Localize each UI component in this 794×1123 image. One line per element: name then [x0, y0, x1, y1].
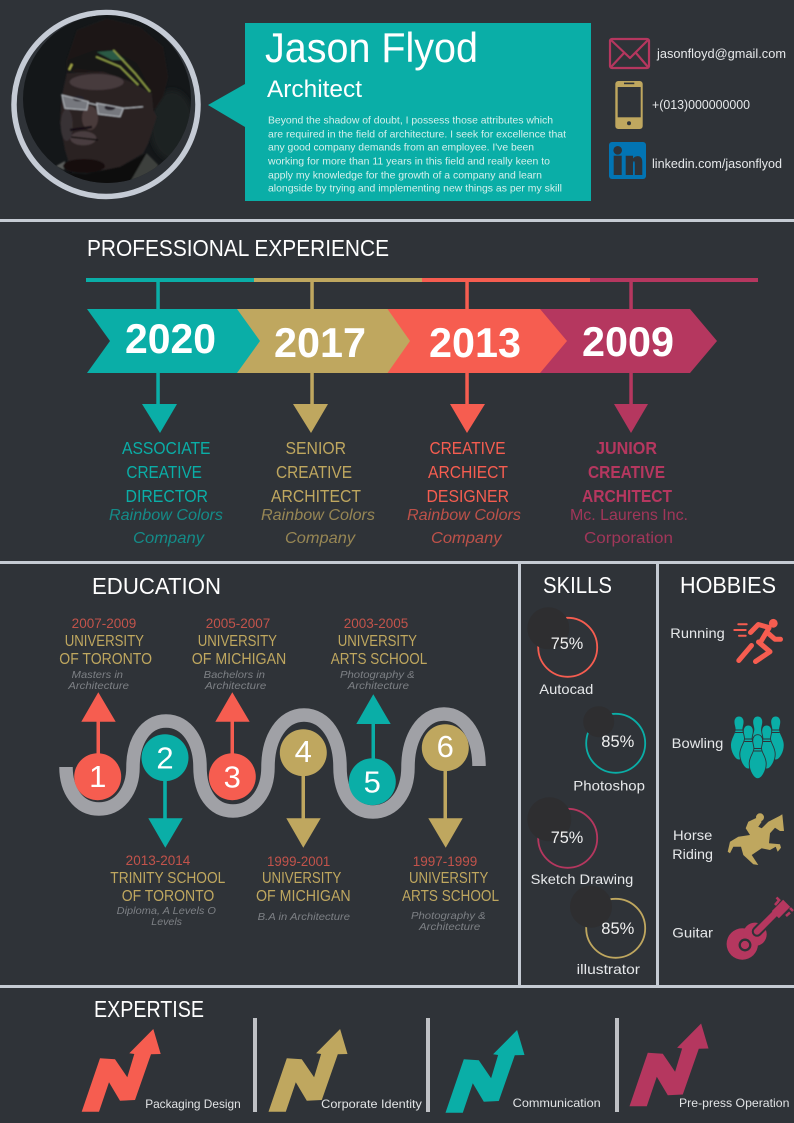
milestone 5: 5 [364, 764, 381, 800]
profile paragraph: are required in the field of architecture. I seek for excellence that [268, 130, 566, 140]
education: 2003-2005: ARTS SCHOOL [331, 651, 428, 668]
milestone 2 [142, 734, 188, 848]
icon: runner [734, 619, 780, 662]
job: senior creative architect: Rainbow Colors [261, 507, 375, 524]
education: 2013-2014: 2013-2014 [126, 853, 191, 868]
milestone 1: 1 [89, 759, 106, 794]
job: senior creative architect: ARCHITECT [271, 486, 361, 506]
education: 2005-2007: OF MICHIGAN [192, 651, 286, 668]
education: 2013-2014: Levels [151, 916, 183, 928]
arrow: 2017 down [293, 373, 328, 433]
education: 1997-1999: 1997-1999 [413, 854, 477, 869]
icon: bowling pins [730, 716, 784, 779]
education: 2003-2005: UNIVERSITY [338, 633, 417, 650]
icon: rising arrow pink [630, 1024, 708, 1106]
skill: sketch drawing [527, 797, 633, 887]
skill: photoshop: Photoshop [573, 778, 645, 794]
job: creative archiect designer: Rainbow Colors [407, 507, 521, 524]
profile paragraph: apply my knowledge for the growth of a company and learn [268, 170, 542, 182]
profile paragraph: working for more than 11 years in this field and really keen to [267, 156, 550, 168]
education: 2005-2007 [192, 616, 286, 692]
job: creative archiect designer: CREATIVE [430, 438, 506, 458]
skill: autocad: Autocad [539, 681, 593, 697]
job: senior creative architect: CREATIVE [276, 462, 352, 482]
profile paragraph [267, 116, 566, 194]
expertise: packaging design [82, 1029, 241, 1112]
education: 2007-2009: OF TORONTO [59, 651, 152, 668]
skill: photoshop: 85% [601, 733, 635, 751]
winding education road [66, 714, 479, 812]
education: 1999-2001 [256, 854, 351, 923]
profile paragraph: any good company demands from an employee. I've been [268, 142, 534, 154]
education: 2005-2007: Architecture [204, 680, 266, 692]
arrow: 2013 down [450, 373, 485, 433]
hobby: guitar [672, 898, 793, 960]
education: 2005-2007: Bachelors in [204, 669, 265, 681]
heading: skills: SKILLS [543, 572, 612, 598]
education: 1997-1999 [402, 854, 499, 933]
milestone 6 [422, 724, 469, 848]
skill: sketch drawing: 75% [551, 829, 584, 847]
job: associate creative director [109, 438, 223, 547]
experience timeline bar [86, 278, 758, 309]
expertise: pre-press operation: Pre-press Operation [679, 1096, 789, 1110]
expertise: corporate identity: Corporate Identity [321, 1097, 422, 1111]
chevron 2020: 2020 [125, 315, 216, 362]
heading: hobbies: HOBBIES [680, 572, 776, 598]
job: senior creative architect: SENIOR [286, 438, 346, 458]
contact: email: jasonfloyd@gmail.com [656, 47, 786, 61]
milestone 3 [209, 692, 256, 800]
job: associate creative director: ASSOCIATE [122, 438, 210, 458]
arrow: 2020 down [142, 373, 177, 433]
heading: expertise: EXPERTISE [94, 996, 204, 1022]
job: associate creative director: CREATIVE [126, 462, 202, 482]
contact: linkedin [609, 142, 782, 179]
job: junior creative architect: Mc. Laurens Inc. [570, 507, 688, 524]
education: 2007-2009: 2007-2009 [72, 616, 136, 631]
job: junior creative architect: Corporation [584, 530, 673, 547]
skill: autocad [527, 607, 597, 697]
heading: professional experience: PROFESSIONAL EXPERIENCE [87, 235, 389, 261]
hobby: horse riding [672, 813, 784, 865]
education: 1999-2001: UNIVERSITY [262, 870, 341, 887]
education: 2003-2005 [331, 616, 428, 692]
arrow: 2009 down [614, 373, 648, 433]
job: associate creative director: Company [133, 530, 205, 547]
education: 2007-2009: Masters in [72, 669, 123, 681]
chevron 2013 [380, 309, 567, 373]
job: creative archiect designer: DESIGNER [426, 486, 509, 506]
chevron 2017: 2017 [274, 319, 366, 366]
icon: phone [615, 81, 643, 129]
callout: name and profile [208, 23, 591, 201]
job: junior creative architect: CREATIVE [588, 462, 665, 482]
education: 2003-2005: Architecture [347, 680, 409, 692]
job: creative archiect designer: ARCHIECT [428, 462, 508, 482]
milestone 4 [280, 729, 327, 848]
expertise: pre-press operation [630, 1024, 789, 1110]
education: 2007-2009: UNIVERSITY [65, 633, 144, 650]
icon: envelope [610, 39, 649, 68]
skill: illustrator: 85% [601, 920, 635, 938]
hobby: bowling: Bowling [672, 735, 723, 751]
year chevrons [87, 309, 717, 373]
education: 2003-2005: 2003-2005 [344, 616, 408, 631]
milestone 4: 4 [295, 734, 312, 769]
education: 2007-2009 [59, 616, 152, 692]
icon: rising arrow coral [82, 1029, 161, 1112]
milestone 5 [349, 694, 396, 805]
chevron 2013: 2013 [429, 319, 521, 366]
job: junior creative architect [570, 438, 688, 547]
education: 2013-2014: TRINITY SCHOOL [110, 870, 226, 887]
hobby: running: Running [670, 625, 725, 641]
education: 1999-2001: 1999-2001 [267, 854, 330, 869]
hobby: running [670, 619, 780, 662]
icon: horse and rider [728, 813, 784, 865]
icon: rising arrow tan [268, 1029, 348, 1112]
hobby: guitar: Guitar [672, 925, 713, 941]
icon: guitar [727, 898, 793, 960]
chevron 2009 [530, 309, 717, 373]
hobby: horse riding: Riding [672, 846, 713, 862]
job title: Architect [267, 76, 362, 103]
skill: sketch drawing: Sketch Drawing [531, 871, 633, 887]
hobby: bowling [672, 716, 784, 779]
chevron 2017 [230, 309, 410, 373]
profile paragraph: alongside by trying and implementing new things as per my skill [268, 184, 562, 194]
skill: illustrator: illustrator [577, 961, 640, 977]
job: associate creative director: Rainbow Colors [109, 507, 223, 524]
job: senior creative architect: Company [285, 530, 356, 547]
job: junior creative architect: JUNIOR [596, 438, 657, 458]
expertise: corporate identity [268, 1029, 422, 1112]
education: 1999-2001: B.A in Architecture [258, 911, 350, 923]
contact: email [610, 39, 786, 68]
education: 2013-2014: OF TORONTO [122, 888, 214, 905]
education: 2013-2014: Diploma, A Levels O [117, 905, 216, 917]
contact: linkedin: linkedin.com/jasonflyod [652, 157, 782, 171]
profile photo [14, 10, 198, 196]
skill: photoshop [573, 706, 645, 794]
education: 2005-2007: 2005-2007 [206, 616, 270, 631]
skill: illustrator [570, 886, 645, 977]
icon: rising arrow teal [446, 1030, 524, 1113]
education: 1997-1999: UNIVERSITY [409, 870, 488, 887]
education: 1997-1999: Photography & [411, 910, 486, 922]
job: junior creative architect: ARCHITECT [582, 486, 672, 506]
heading: education: EDUCATION [92, 573, 221, 599]
education: 2007-2009: Architecture [67, 680, 129, 692]
job: associate creative director: DIRECTOR [126, 486, 208, 506]
milestone 2: 2 [156, 740, 174, 776]
education: 2013-2014 [110, 853, 226, 928]
skill: autocad: 75% [551, 635, 584, 653]
contact: phone: +(013)000000000 [652, 98, 750, 112]
milestone 3: 3 [224, 760, 241, 794]
expertise: communication [446, 1030, 601, 1113]
expertise: packaging design: Packaging Design [145, 1097, 241, 1111]
name: Jason Flyod [265, 24, 478, 71]
icon: linkedin [609, 142, 646, 179]
chevron 2009: 2009 [582, 318, 674, 365]
chevron 2020 [87, 309, 260, 373]
education: 1997-1999: ARTS SCHOOL [402, 888, 499, 905]
job: creative archiect designer: Company [431, 530, 503, 547]
hobby: horse riding: Horse [673, 827, 713, 843]
job: creative archiect designer [407, 438, 521, 547]
education: 1997-1999: Architecture [418, 921, 480, 933]
education: 1999-2001: OF MICHIGAN [256, 888, 351, 905]
milestone 6: 6 [437, 729, 454, 764]
contact: phone [615, 81, 750, 129]
profile paragraph: Beyond the shadow of doubt, I possess those attributes which [268, 116, 553, 126]
milestone 1 [74, 692, 121, 800]
education: 2003-2005: Photography & [340, 669, 415, 681]
education: 2005-2007: UNIVERSITY [198, 633, 277, 650]
job: senior creative architect [261, 438, 375, 547]
expertise: communication: Communication [513, 1096, 601, 1110]
